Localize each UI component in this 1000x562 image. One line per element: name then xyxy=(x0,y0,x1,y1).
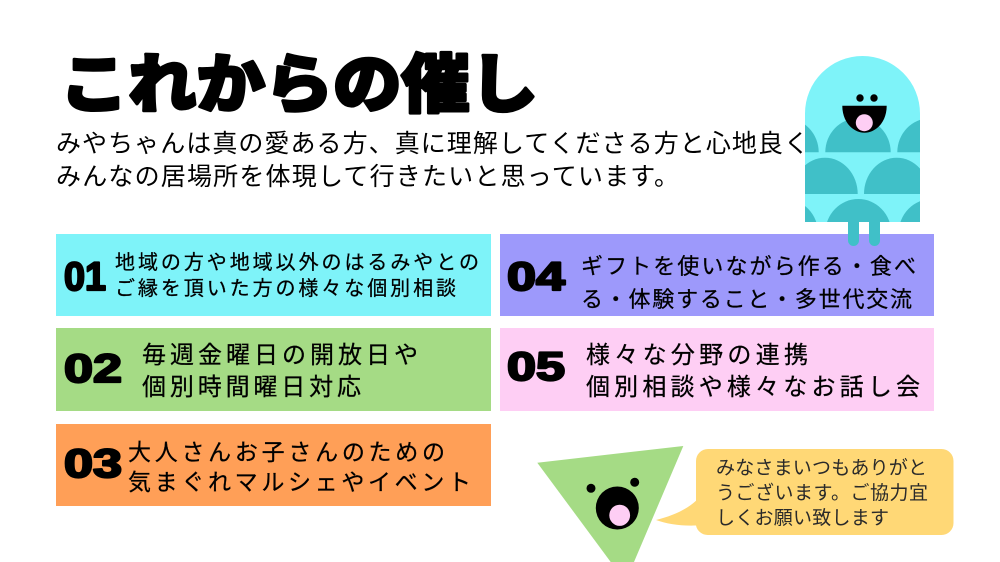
panel 05: 様々な分野の連携 xyxy=(586,342,808,369)
bubble text: みなさまいつもありがと xyxy=(716,457,927,479)
panel 02 xyxy=(56,328,491,411)
body xyxy=(805,56,920,222)
triangle mouth xyxy=(596,486,639,530)
triangle eyes xyxy=(586,478,639,493)
panel 01: 01 xyxy=(64,255,106,299)
title: これからの催し xyxy=(60,49,538,121)
intro text xyxy=(56,130,809,191)
cyan character xyxy=(805,56,920,246)
panel 04: ギフトを使いながら作る・食べ xyxy=(581,254,916,279)
panel 05 xyxy=(500,328,934,411)
panel 01: ご縁を頂いた方の様々な個別相談 xyxy=(115,277,456,300)
panel 05: 個別相談や様々なお話し会 xyxy=(586,374,920,401)
panel 03 xyxy=(56,424,491,506)
green triangle character xyxy=(537,446,683,562)
panel 02: 個別時間曜日対応 xyxy=(142,374,361,401)
panel 05: 05 xyxy=(507,345,565,389)
panel 04: 04 xyxy=(507,255,566,299)
panel 04: る・体験すること・多世代交流 xyxy=(581,287,912,312)
panel 01 xyxy=(56,234,491,316)
speech bubble xyxy=(656,449,954,535)
bubble shape xyxy=(656,449,954,535)
triangle body xyxy=(537,446,683,562)
panel 02: 02 xyxy=(64,347,122,391)
triangle tongue xyxy=(609,505,630,526)
scale pattern xyxy=(805,120,920,222)
tongue xyxy=(856,114,873,131)
panel 02: 毎週金曜日の開放日や xyxy=(142,342,418,369)
mouth xyxy=(842,106,887,133)
panel 03: 気まぐれマルシェやイベント xyxy=(128,469,471,495)
legs xyxy=(848,215,880,246)
bubble text xyxy=(716,457,928,529)
intro text: みやちゃんは真の愛ある方、真に理解してくださる方と心地良く xyxy=(56,130,809,158)
bubble text: しくお願い致します xyxy=(716,507,889,529)
panel 04 xyxy=(500,234,934,316)
panel 03: 大人さんお子さんのための xyxy=(128,439,445,465)
panel 03: 03 xyxy=(64,442,122,486)
eyes xyxy=(856,94,878,102)
bubble text: うございます。ご協力宜 xyxy=(716,481,928,504)
intro text: みんなの居場所を体現して行きたいと思っています。 xyxy=(56,163,679,191)
panel 01: 地域の方や地域以外のはるみやとの xyxy=(115,251,479,274)
